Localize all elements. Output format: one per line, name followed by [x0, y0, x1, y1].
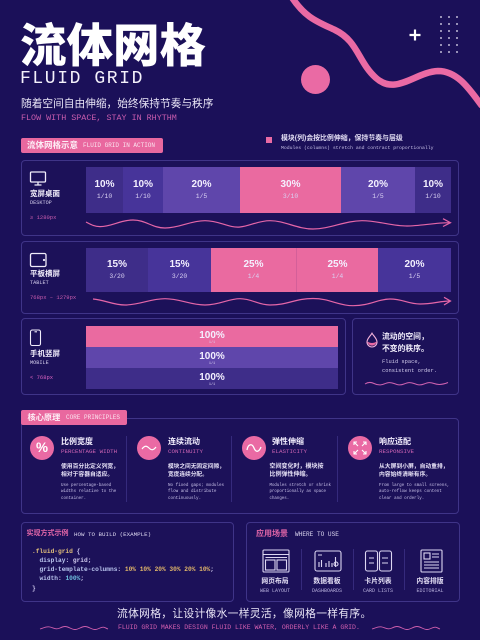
principle: elasticity: proportionally as space	[270, 490, 326, 494]
panel: callout fluid space	[352, 318, 459, 394]
desktop columns: 1/10	[97, 193, 112, 200]
principle: elasticity: ELASTICITY	[272, 448, 307, 455]
code block: display: grid;	[39, 557, 91, 564]
subtitle english: FLUID GRID	[20, 69, 144, 89]
footer wave left	[40, 626, 108, 630]
icon: water drop	[366, 332, 378, 348]
principle: responsive	[348, 436, 449, 501]
principle: elasticity: 空间变化时，模块按	[270, 464, 324, 470]
principle: elasticity	[242, 436, 331, 501]
panel: tablet	[21, 241, 459, 314]
code block: .fluid-grid {	[32, 548, 80, 554]
footer english: FLUID GRID MAKES DESIGN FLUID LIKE WATER, ORDERLY LIKE A GRID.	[118, 624, 360, 631]
section tag: fluid grid in action	[21, 138, 163, 153]
arrow wave: tablet	[93, 296, 452, 306]
mobile rows: 100%	[199, 372, 225, 382]
tablet columns	[86, 248, 451, 292]
mobile rows: 1/1	[209, 340, 215, 344]
label: mobile: < 768px	[30, 374, 53, 381]
usage: editorial: 内容排版	[416, 578, 444, 584]
label: desktop: 宽屏桌面	[30, 189, 60, 198]
usage: dashboards	[312, 550, 342, 594]
callout text	[382, 359, 437, 374]
desktop columns: 10%	[94, 179, 114, 190]
panel: core principles	[21, 418, 459, 514]
dot grid	[440, 16, 458, 53]
principle: percentage width: 使用百分比定义列宽，	[61, 464, 119, 470]
title: 流体网格	[20, 8, 206, 76]
usage: editorial: EDITORIAL	[416, 588, 444, 594]
mobile rows	[86, 326, 338, 389]
section tag: fluid grid in action: 流体网格示意	[27, 140, 78, 150]
tablet columns: 15%	[169, 259, 190, 270]
desktop columns	[86, 167, 451, 213]
legend note: 模块(列)会按比例伸缩，保持节奏与层级	[281, 135, 403, 142]
label: desktop: DESKTOP	[30, 200, 52, 206]
usage: editorial	[416, 550, 444, 594]
heading: 比例宽度	[61, 437, 93, 446]
principle: continuity: 连续流动	[168, 437, 200, 446]
principle: responsive: clear and orderly.	[379, 497, 424, 501]
label: tablet	[30, 269, 76, 301]
label: mobile: MOBILE	[30, 360, 49, 366]
principle: responsive: 从大屏到小屏，自动重排，	[379, 464, 449, 470]
desktop columns: 1/5	[372, 193, 384, 200]
principle: percentage width	[30, 436, 119, 501]
label: tablet: 平板横屏	[30, 269, 60, 278]
tablet columns: 1/4	[248, 273, 259, 280]
desktop columns: 1/10	[425, 193, 441, 200]
principle: elasticity: 弹性伸缩	[272, 437, 304, 446]
label: tablet: TABLET	[30, 280, 49, 286]
usage: web layout	[260, 550, 290, 594]
label: mobile	[30, 349, 60, 381]
section tag: fluid grid in action: FLUID GRID IN ACTION	[83, 142, 155, 149]
code block: }	[32, 585, 36, 592]
icon: arrows	[348, 436, 372, 460]
label: mobile: 手机竖屏	[30, 349, 60, 358]
usage heading: 应用场景	[256, 529, 288, 538]
principle: elasticity: changes.	[270, 497, 289, 501]
principle: percentage width: widths relative to the	[61, 490, 116, 494]
mobile rows: 1/1	[209, 362, 215, 366]
principle: continuity: No fixed gaps; modules	[168, 483, 224, 488]
icon: wave	[137, 436, 161, 460]
desktop columns: 10%	[133, 179, 153, 190]
tagline chinese: 随着空间自由伸缩，始终保持节奏与秩序	[21, 98, 213, 110]
pink circle	[301, 65, 330, 94]
tablet columns: 20%	[404, 259, 424, 270]
desktop columns: 1/5	[196, 193, 207, 200]
desktop columns: 10%	[423, 179, 443, 190]
desktop columns: 20%	[191, 179, 212, 190]
arrow wave: desktop	[86, 218, 452, 230]
callout heading: 不变的秩序。	[382, 344, 429, 352]
section tag: core principles: CORE PRINCIPLES	[66, 414, 120, 420]
principle: continuity: continuously.	[168, 496, 201, 501]
panel: where to use: WHERE TO USE	[295, 531, 339, 538]
decorative wave: top right	[290, 0, 480, 108]
tablet columns: 1/5	[409, 273, 420, 280]
principle: responsive: auto-reflow keeps content	[379, 490, 442, 494]
tagline english: FLOW WITH SPACE, STAY IN RHYTHM	[21, 113, 177, 123]
mobile rows: 100%	[199, 330, 225, 340]
code heading: 实现方式示例	[26, 530, 68, 537]
footer statement: 流体网格，让设计像水一样灵活，像网格一样有序。	[117, 608, 372, 620]
code block	[32, 548, 214, 592]
usage: dashboards: 数据看板	[313, 578, 341, 584]
usage: card lists	[363, 550, 393, 594]
label: tablet: 768px – 1279px	[30, 294, 76, 301]
tablet columns: 25%	[243, 259, 264, 270]
label: desktop	[30, 189, 60, 221]
principle: percentage width: container.	[61, 497, 86, 501]
tablet columns: 3/20	[172, 273, 187, 280]
callout heading	[382, 332, 429, 352]
usage: web layout: 网页布局	[261, 578, 289, 584]
panel: where to use	[246, 522, 460, 602]
section tag: core principles: 核心原理	[28, 413, 60, 422]
desktop columns: 30%	[280, 179, 300, 190]
mobile rows: 1/1	[209, 382, 215, 386]
icon: percent	[30, 436, 54, 460]
principle: continuity: 模块之间无固定间隙，	[168, 464, 225, 470]
principle: responsive: 响应适配	[379, 437, 411, 446]
icon: elastic wave	[242, 436, 266, 460]
footer wave right	[372, 626, 440, 630]
panel: how to build: HOW TO BUILD (EXAMPLE)	[74, 531, 151, 538]
usage: card lists: CARD LISTS	[363, 588, 393, 594]
callout text: consistent order.	[382, 368, 437, 374]
desktop columns: 3/10	[283, 193, 298, 200]
usage: web layout: WEB LAYOUT	[260, 588, 290, 594]
icon: percent: %	[36, 440, 48, 455]
panel: how to build	[21, 522, 234, 602]
principle: responsive: 内容始终清晰有序。	[379, 472, 431, 478]
tablet columns: 3/20	[109, 273, 125, 280]
principle: continuity	[137, 436, 225, 501]
callout heading: 流动的空间，	[382, 332, 429, 340]
icon: phone	[30, 330, 42, 346]
legend note: Modules (columns) stretch and contract proportionally	[281, 146, 434, 151]
tablet columns: 25%	[327, 259, 348, 270]
plus icon	[410, 30, 420, 40]
principle: elasticity: Modules stretch or shrink	[270, 484, 331, 488]
mobile rows: 100%	[199, 350, 225, 362]
section tag: core principles	[21, 410, 127, 425]
principle: continuity: 宽度连续分配。	[168, 472, 208, 478]
code block: width: 100%;	[39, 575, 84, 582]
tablet columns: 15%	[107, 259, 127, 270]
callout wave	[364, 382, 448, 386]
principle: continuity: flow and distribute	[168, 489, 216, 494]
principle: elasticity: 比例弹性伸缩。	[270, 472, 312, 478]
icon: tablet	[30, 252, 47, 268]
tablet columns: 1/4	[332, 273, 343, 280]
principle: responsive: From large to small screens,	[379, 484, 449, 488]
principle: percentage width: Use percentage-based	[61, 484, 111, 488]
icon: monitor	[30, 171, 46, 186]
principle: percentage width: 相对于容器自适应。	[61, 472, 113, 478]
principle: responsive: RESPONSIVE	[379, 448, 414, 455]
principle: percentage width: PERCENTAGE WIDTH	[61, 448, 117, 455]
usage: dashboards: DASHBOARDS	[312, 588, 342, 594]
panel: mobile	[21, 318, 346, 394]
principle: continuity: CONTINUITY	[168, 448, 203, 455]
legend note	[266, 134, 434, 151]
label: desktop: ≥ 1280px	[30, 214, 56, 221]
panel: desktop	[21, 160, 459, 236]
desktop columns: 20%	[368, 179, 388, 190]
usage: card lists: 卡片列表	[364, 578, 392, 584]
desktop columns: 1/10	[135, 193, 151, 200]
code block: grid-template-columns: 10% 10% 20% 30% 20% 10%;	[39, 566, 214, 573]
callout text: Fluid space,	[382, 359, 421, 365]
